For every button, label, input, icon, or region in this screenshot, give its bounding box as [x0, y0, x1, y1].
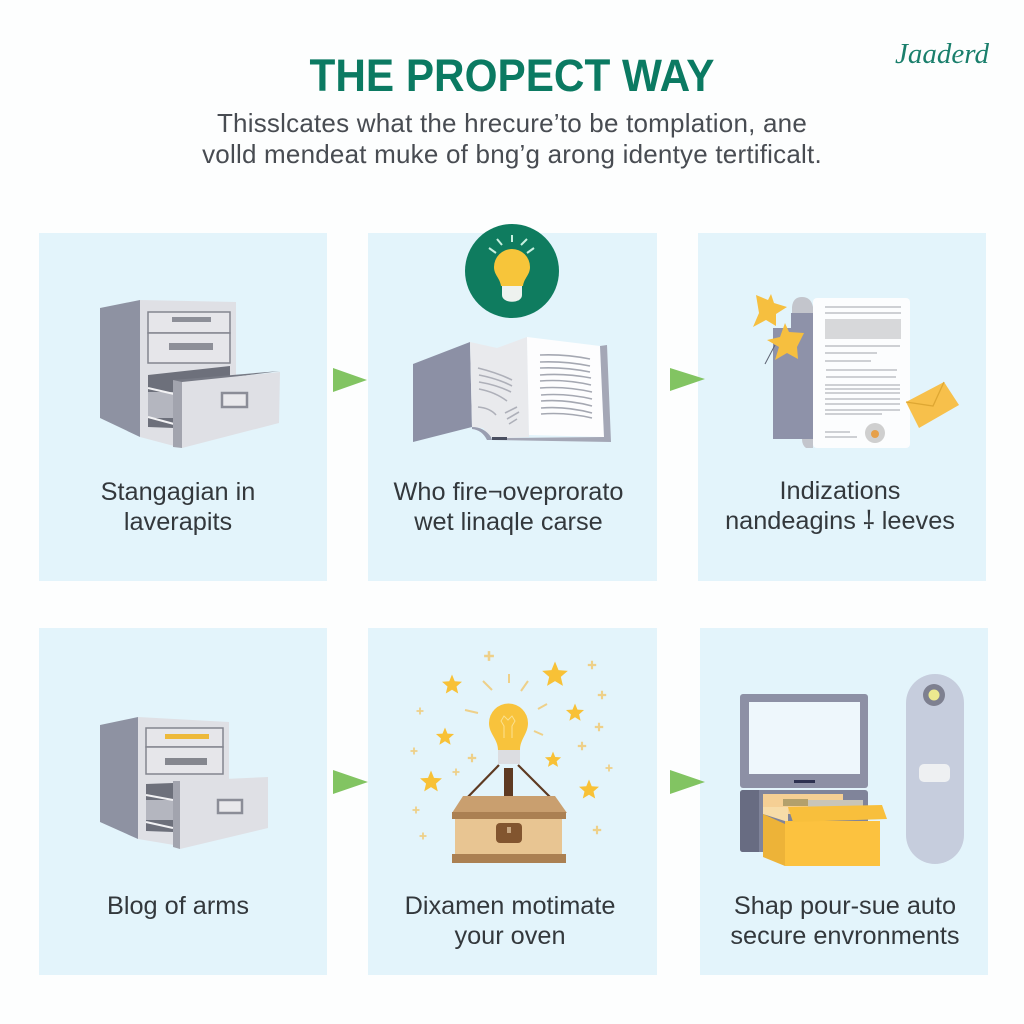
icon: document with stars: [753, 294, 959, 448]
subtitle: [202, 108, 822, 169]
arrow: bottom 1: [333, 770, 368, 794]
icon: filing cabinet top: [100, 300, 280, 448]
label: bottom right: secure envronments: [730, 922, 960, 950]
panel: top left: [39, 233, 327, 581]
label: bottom right: Shap pour-sue auto: [734, 892, 956, 920]
title: THE PROPECT WAY: [309, 50, 715, 101]
label: top left: [101, 478, 255, 536]
label: top right: Indizations: [780, 477, 900, 505]
subtitle: volld mendeat muke of bng’g arong identye tertificalt.: [202, 139, 822, 169]
label: top middle: Who fire¬oveprorato: [394, 478, 623, 506]
label: top left: Stangagian in: [101, 478, 255, 506]
label: top right: nandeagins ⸸ leeves: [725, 507, 955, 535]
logo script: Jaaderd: [895, 38, 989, 70]
panel: top middle: [368, 233, 657, 581]
panel: bottom left: [39, 628, 327, 975]
label: top middle: wet linaqle carse: [414, 508, 603, 536]
icon: monitor, folder and device: [740, 674, 964, 866]
label: bottom right: [730, 892, 960, 950]
arrow: top 1: [333, 368, 367, 392]
label: bottom middle: your oven: [454, 922, 566, 950]
arrow: bottom 2: [670, 770, 705, 794]
icon: lightbulb on box with stars: [410, 651, 612, 863]
label: bottom middle: Dixamen motimate: [405, 892, 615, 920]
label: top middle: [394, 478, 623, 536]
panel: bottom right: [700, 628, 988, 975]
icon: lightbulb badge: [465, 224, 559, 318]
icon: filing cabinet bottom: [100, 717, 268, 849]
label: top right: [725, 477, 955, 535]
label: bottom left: Blog of arms: [107, 892, 249, 920]
icon: open book: [413, 337, 611, 442]
panel: bottom middle: [368, 628, 657, 975]
label: bottom middle: [405, 892, 615, 950]
panel: top right: [698, 233, 986, 581]
arrow: top 2: [670, 368, 705, 391]
subtitle: Thisslcates what the hrecure’to be tomplation, ane: [217, 108, 807, 138]
label: top left: laverapits: [124, 508, 232, 536]
